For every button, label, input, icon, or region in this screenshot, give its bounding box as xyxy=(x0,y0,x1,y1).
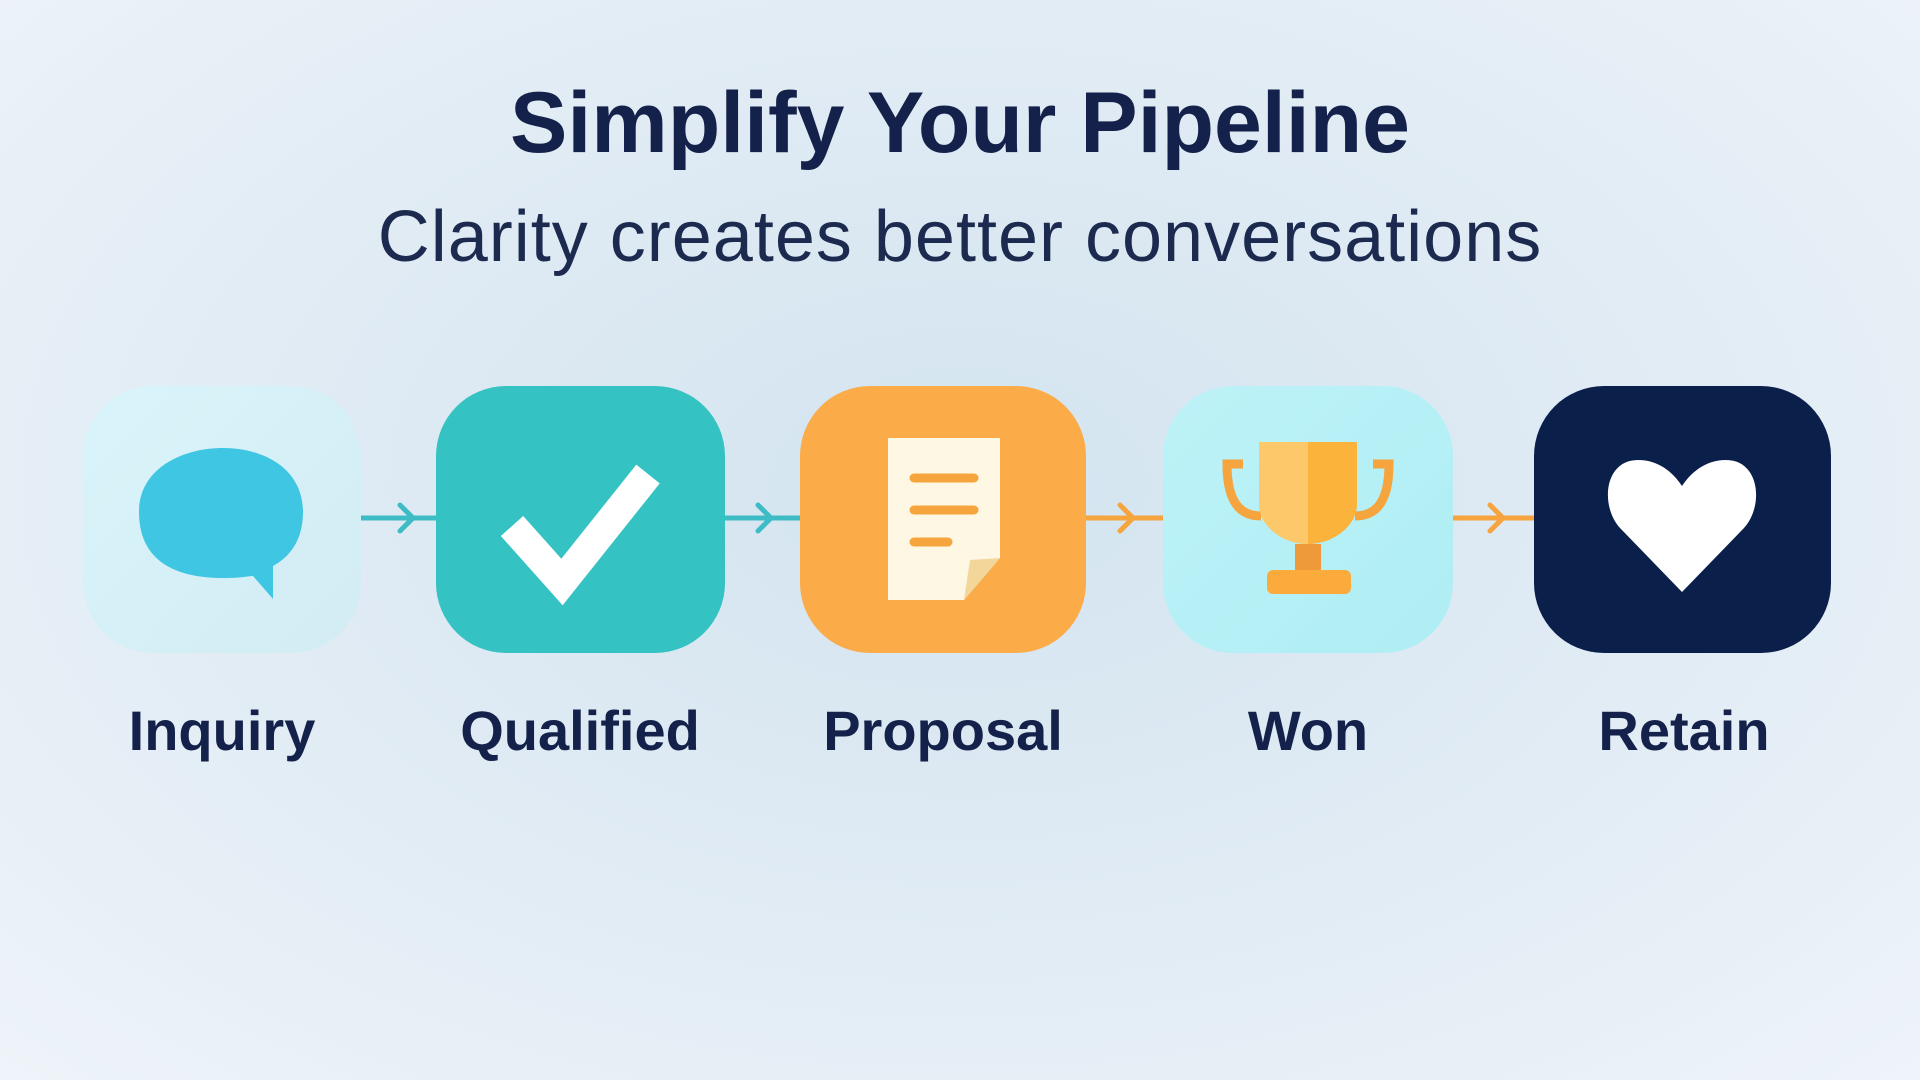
stage: retain icon box xyxy=(1534,386,1831,653)
stage: won icon box xyxy=(1163,386,1453,653)
stage: proposal icon box xyxy=(800,386,1086,653)
arrow: qualified to proposal xyxy=(725,505,800,531)
icon: speech bubble xyxy=(139,448,303,599)
label: Won: Won xyxy=(1248,699,1368,762)
arrow: won to retain xyxy=(1453,505,1534,531)
title: Simplify Your Pipeline xyxy=(510,75,1410,171)
stage: qualified icon box xyxy=(436,386,725,653)
label: Qualified: Qualified xyxy=(460,699,700,762)
icon: trophy xyxy=(1222,442,1394,594)
icon: check mark xyxy=(500,464,660,606)
label: Inquiry: Inquiry xyxy=(129,699,315,762)
icon: document xyxy=(888,438,1000,600)
subtitle: Clarity creates better conversations xyxy=(378,197,1542,277)
arrow: proposal to won xyxy=(1086,505,1163,531)
icon: heart xyxy=(1608,460,1756,592)
label: Proposal: Proposal xyxy=(823,699,1063,762)
label: Retain: Retain xyxy=(1598,699,1770,762)
stage: inquiry icon box xyxy=(83,386,361,653)
arrow: inquiry to qualified xyxy=(361,505,436,531)
